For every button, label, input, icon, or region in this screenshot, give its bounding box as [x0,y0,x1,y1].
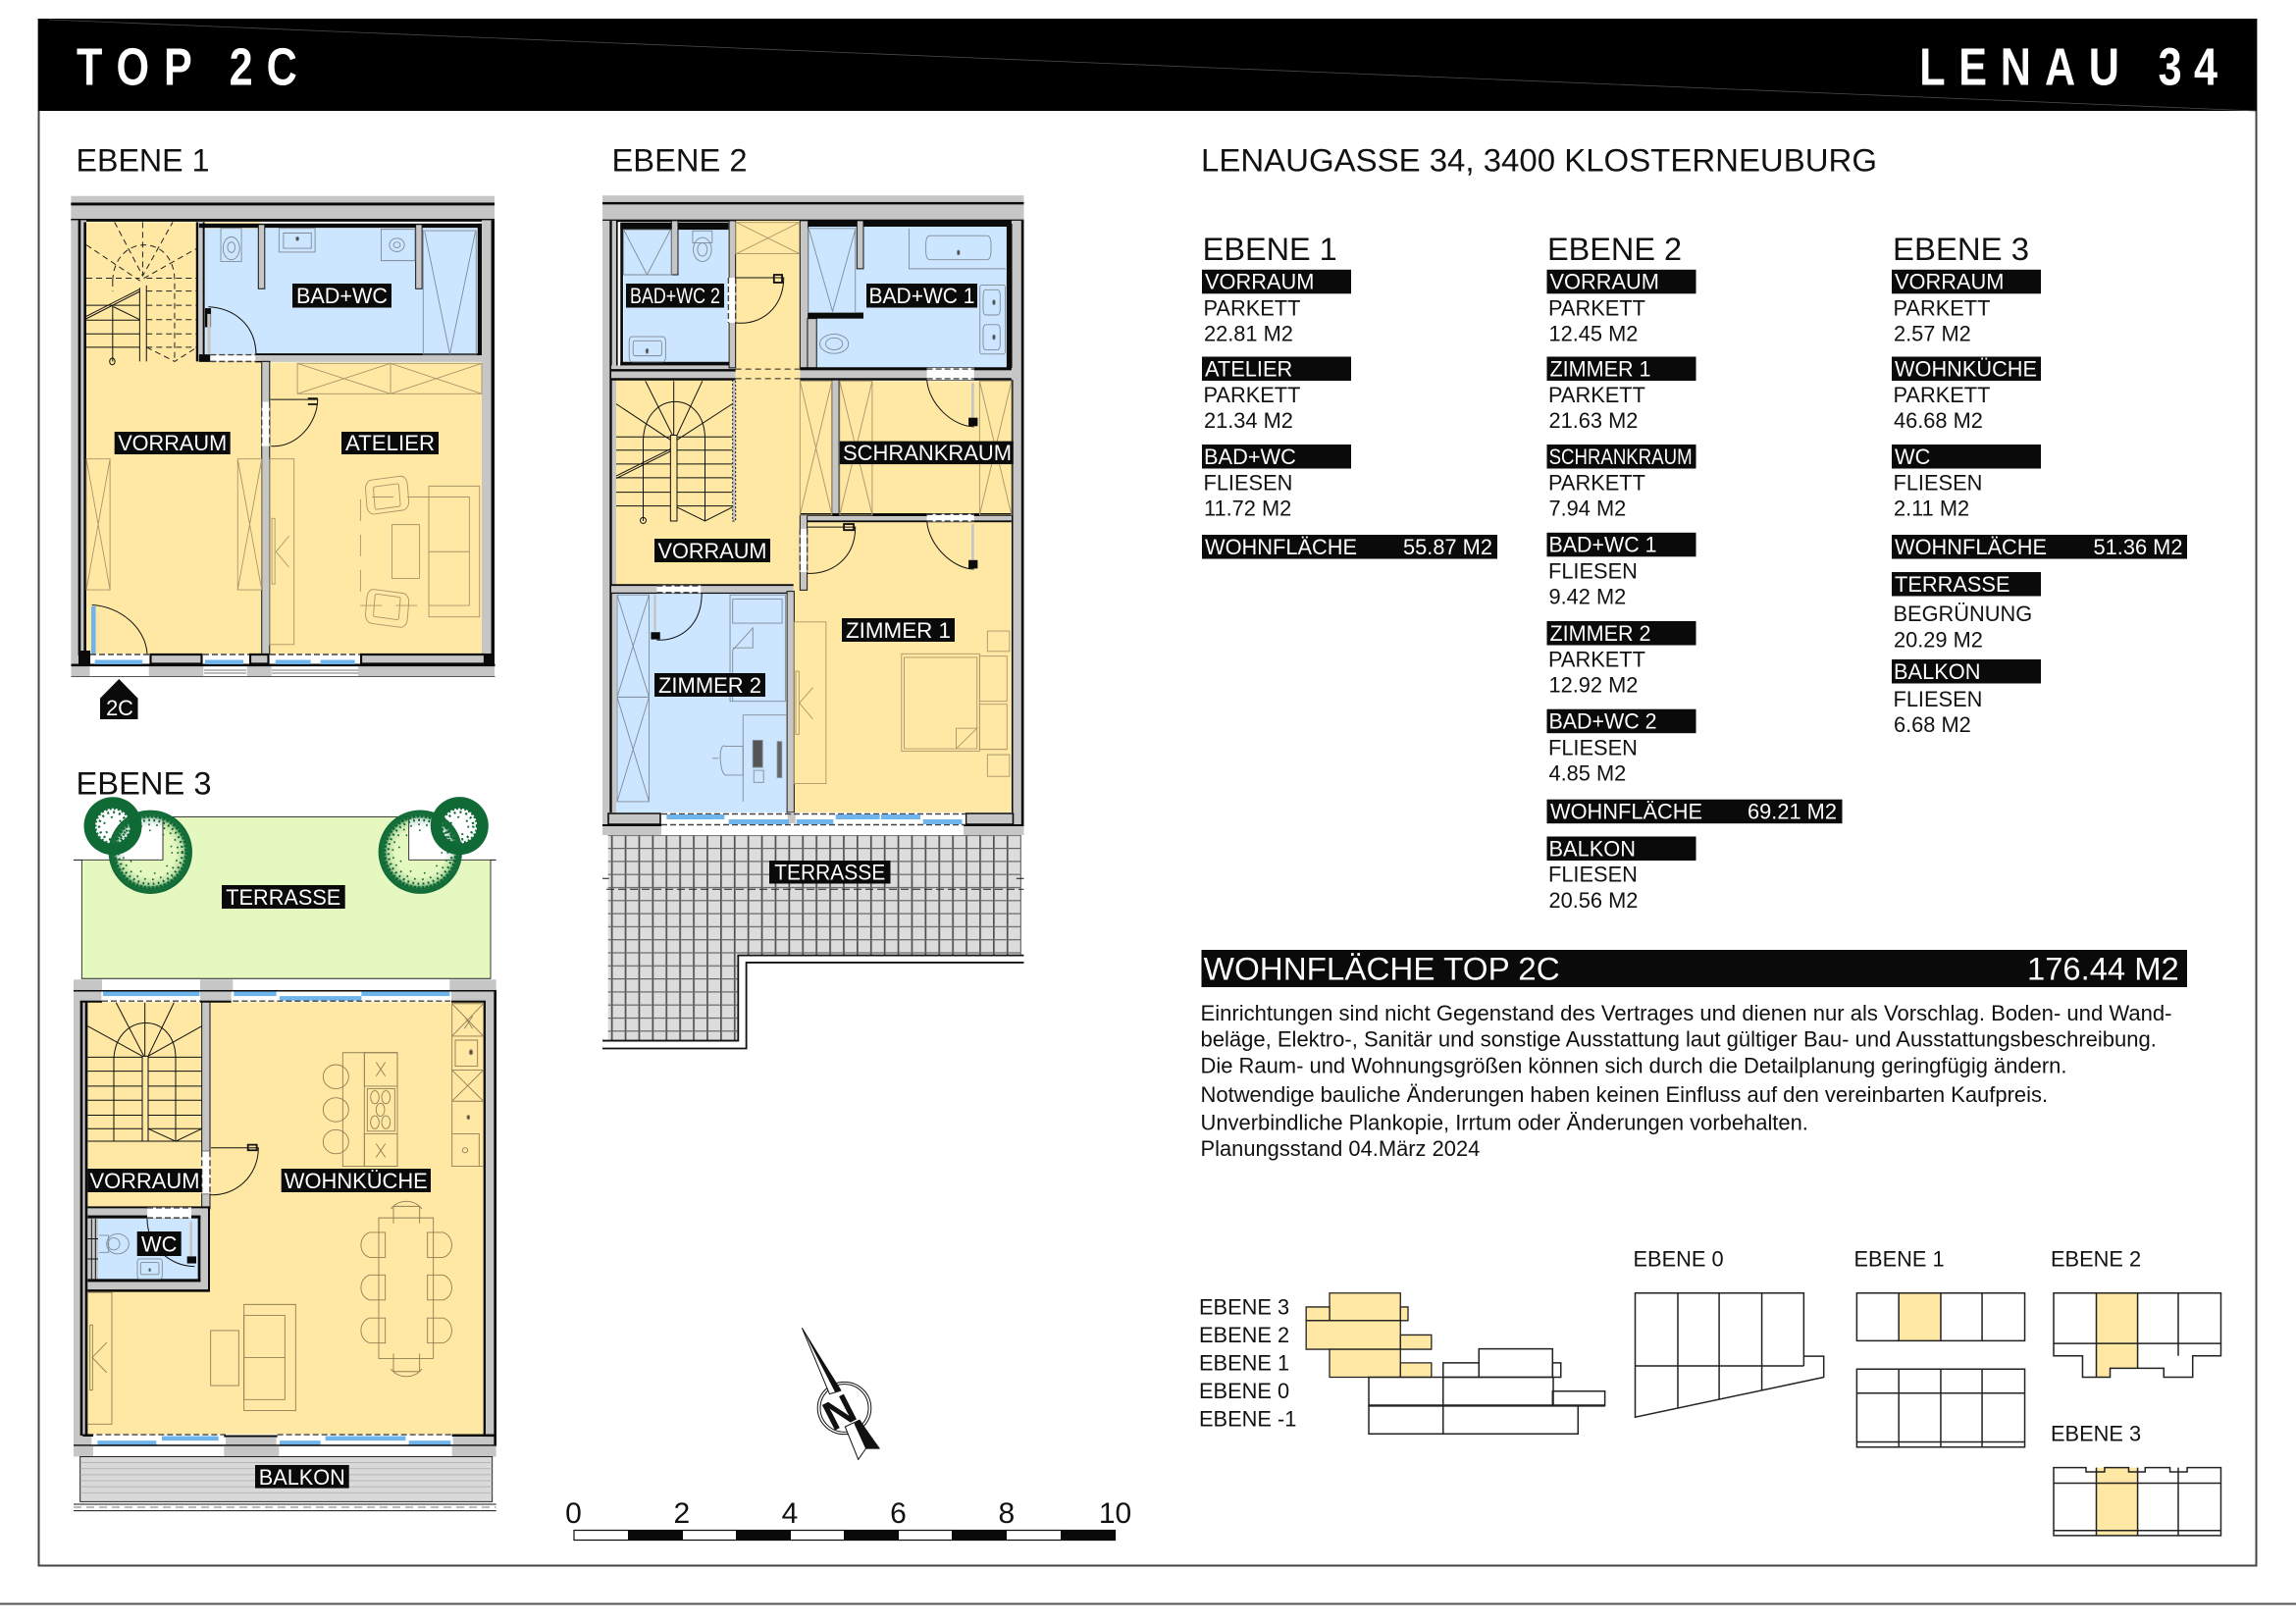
heading: ebene 2: EBENE 2 [612,143,748,179]
area table: ebene 3: EBENE 3 [1893,232,2029,267]
scale bar: 2 [673,1497,690,1530]
terrace window band [602,812,1024,835]
key plan: ebene 1 [1854,1246,2025,1447]
area table: ebene 3: BALKON [1894,659,1980,684]
area table: ebene 2: PARKETT [1548,648,1645,672]
entrance marker 2C [100,679,137,720]
area table: ebene 1: WOHNFLÄCHE [1205,535,1357,559]
section key diagram: EBENE -1 [1199,1407,1296,1432]
area table: ebene 3: WC [1895,445,1930,469]
area table: ebene 3: BEGRÜNUNG [1894,602,2032,626]
doors [656,278,974,640]
label: TERRASSE: TERRASSE [774,860,885,885]
stairs [87,1003,202,1141]
area table: ebene 1: VORRAUM [1205,270,1314,294]
area table: ebene 2: 4.85 M2 [1548,760,1626,785]
area table: ebene 3: 51.36 M2 [2094,535,2182,559]
area table: ebene 3: 2.11 M2 [1894,497,1969,521]
area table: ebene 3: VORRAUM [1895,270,2004,294]
area table: ebene 3: 6.68 M2 [1894,712,1971,737]
section key diagram: EBENE 0 [1199,1379,1289,1403]
area table: ebene 2 [1546,232,1843,913]
area table: ebene 3: WOHNFLÄCHE [1895,535,2047,559]
scale bar: 4 [782,1497,798,1530]
area table: ebene 3: PARKETT [1894,383,1990,407]
section key diagram: EBENE 2 [1199,1323,1289,1347]
disclaimer text: Notwendige bauliche Änderungen haben keinen Einfluss auf den vereinbarten Kaufpreis. [1201,1082,2048,1107]
heading: ebene 1: EBENE 1 [77,143,210,179]
label: BAD+WC 1: BAD+WC 1 [869,284,975,308]
area table: ebene 3: 2.57 M2 [1894,321,1971,345]
area table: ebene 2: PARKETT [1548,471,1645,496]
entrance marker 2C: 2C [106,696,133,720]
section key diagram [1199,1293,1605,1434]
key plan: ebene 0 [1633,1246,1824,1417]
header title right: LENAU 34 [1919,38,2218,97]
area table: ebene 1: PARKETT [1203,383,1300,407]
area table: ebene 2: 7.94 M2 [1548,497,1626,521]
disclaimer text [1201,1001,2172,1161]
floor plan: ebene 3 [74,797,496,1511]
area table: ebene 3: FLIESEN [1894,687,1982,711]
area table: ebene 3: 46.68 M2 [1894,408,1983,433]
area table: ebene 2: FLIESEN [1548,863,1638,887]
area table: ebene 2: EBENE 2 [1547,232,1682,267]
section key diagram: EBENE 3 [1199,1295,1289,1319]
area table: ebene 1: EBENE 1 [1203,232,1337,267]
area table: ebene 2: FLIESEN [1548,735,1638,759]
header title left: TOP 2C [77,38,297,97]
area table: ebene 2: ZIMMER 2 [1550,621,1650,646]
key plan: ebene 3: EBENE 3 [2051,1421,2141,1445]
label: BAD+WC 2: BAD+WC 2 [630,284,720,308]
area table: ebene 1: PARKETT [1203,296,1300,320]
key plan: ebene 2 [2051,1246,2220,1378]
area table: ebene 3: TERRASSE [1895,572,2009,597]
heading: ebene 3: EBENE 3 [77,765,212,801]
compass north arrow [802,1328,879,1459]
scale bar: 10 [1099,1497,1131,1530]
area table: ebene 1: BAD+WC [1204,445,1296,469]
total area bar [1201,950,2187,987]
key plan: ebene 1: EBENE 1 [1854,1246,1945,1271]
scale bar: 0 [565,1497,582,1530]
bottom page rule [0,1603,2296,1605]
area table: ebene 2: 12.92 M2 [1548,673,1638,698]
floor plan: ebene 2 [602,195,1024,1049]
label: TERRASSE: TERRASSE [226,885,340,910]
terrace paving [608,835,1021,1041]
area table: ebene 1: FLIESEN [1203,471,1292,496]
area table: ebene 2: FLIESEN [1548,559,1638,583]
area table: ebene 2: PARKETT [1548,296,1645,320]
key plan: ebene 2: EBENE 2 [2051,1246,2141,1271]
balcony deck [74,1456,496,1511]
area table: ebene 1 [1202,232,1497,559]
stairs [616,381,732,523]
area table: ebene 2: BAD+WC 1 [1548,533,1656,557]
area table: ebene 1: 22.81 M2 [1204,321,1293,345]
area table: ebene 2: BAD+WC 2 [1548,708,1656,734]
disclaimer text: Die Raum- und Wohnungsgrößen können sich durch die Detailplanung geringfügig ändern. [1201,1054,2066,1077]
area table: ebene 2: SCHRANKRAUM [1549,445,1693,469]
area table: ebene 3: WOHNKÜCHE [1895,356,2037,381]
label: VORRAUM: VORRAUM [118,431,227,455]
label: ZIMMER 1: ZIMMER 1 [846,618,951,643]
area table: ebene 2: ZIMMER 1 [1550,356,1650,381]
scale bar: 8 [998,1497,1015,1530]
key plan: ebene 0: EBENE 0 [1633,1246,1724,1271]
floor plan: ebene 1 [71,196,495,720]
disclaimer text: Planungsstand 04.März 2024 [1201,1136,1480,1161]
label: BAD+WC: BAD+WC [296,284,388,308]
area table: ebene 2: 20.56 M2 [1548,888,1638,913]
area table: ebene 2: 21.63 M2 [1548,408,1638,433]
area table: ebene 2: PARKETT [1548,383,1645,407]
scale bar: 6 [890,1497,907,1530]
area table: ebene 3: PARKETT [1894,296,1990,320]
key plan: ebene 3 [2051,1421,2220,1536]
area table: ebene 2: 9.42 M2 [1548,584,1626,608]
disclaimer text: Einrichtungen sind nicht Gegenstand des Vertrages und dienen nur als Vorschlag. Boden- und Wand- [1201,1001,2172,1025]
label: WC: WC [141,1232,177,1256]
area table: ebene 2: WOHNFLÄCHE [1550,800,1702,824]
area table: ebene 3 [1892,232,2187,737]
area table: ebene 1: 55.87 M2 [1403,535,1492,559]
label: VORRAUM: VORRAUM [657,539,767,563]
disclaimer text: Unverbindliche Plankopie, Irrtum oder Änderungen vorbehalten. [1201,1111,1808,1135]
fixtures [617,229,1006,802]
area table: ebene 3: FLIESEN [1894,471,1982,496]
total area bar: 176.44 M2 [2027,952,2179,987]
label: BALKON: BALKON [259,1465,345,1490]
compass north arrow: N [815,1385,863,1440]
total area bar: WOHNFLÄCHE TOP 2C [1204,952,1560,987]
area table: ebene 1: 21.34 M2 [1204,408,1293,433]
header band [38,19,2257,111]
scale bar [565,1497,1131,1541]
disclaimer text: beläge, Elektro-, Sanitär und sonstige Ausstattung laut gültiger Bau- und Ausstattungsbeschreibung. [1201,1027,2157,1052]
section key diagram: EBENE 1 [1199,1350,1289,1375]
trees [84,797,489,894]
label: WOHNKÜCHE: WOHNKÜCHE [285,1169,428,1193]
area table: ebene 2: BALKON [1548,836,1636,861]
label: SCHRANKRAUM: SCHRANKRAUM [843,441,1012,465]
kitchen and living furniture [87,1004,484,1424]
area table: ebene 3: 20.29 M2 [1894,627,1983,652]
label: VORRAUM: VORRAUM [90,1169,200,1193]
heading: address: LENAUGASSE 34, 3400 KLOSTERNEUBURG [1201,143,1877,179]
area table: ebene 1: ATELIER [1205,356,1292,381]
area table: ebene 2: VORRAUM [1550,270,1659,294]
entrance and window band [71,651,495,677]
area table: ebene 1: 11.72 M2 [1204,497,1291,521]
label: ATELIER: ATELIER [345,431,435,455]
area table: ebene 2: 12.45 M2 [1548,321,1638,345]
terrace edge lines [602,956,1023,1049]
area table: ebene 2: 69.21 M2 [1748,800,1837,824]
furniture zimmer 1 and wardrobes [736,223,1012,784]
label: ZIMMER 2: ZIMMER 2 [658,673,761,698]
